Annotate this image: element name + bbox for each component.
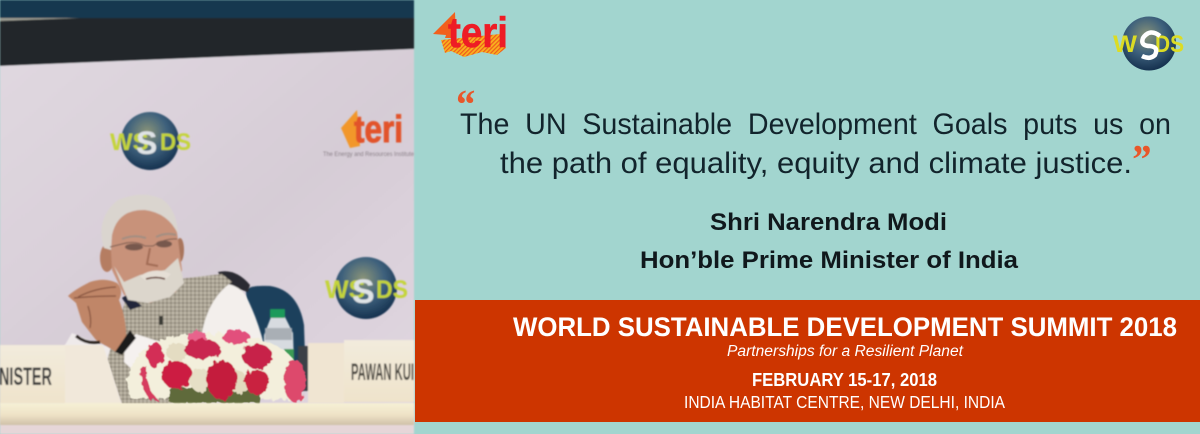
person xyxy=(62,195,264,405)
glasses xyxy=(110,239,177,247)
flower arrangement xyxy=(127,330,306,403)
banner background xyxy=(415,300,1200,422)
backdrop logo: WSDS right: WS xyxy=(325,276,365,304)
summit venue: INDIA HABITAT CENTRE, NEW DELHI, INDIA xyxy=(684,392,1005,412)
teri wordmark: teri xyxy=(448,9,508,57)
backdrop logo: WSDS left: WS xyxy=(110,129,149,156)
backdrop logo: WSDS left xyxy=(110,112,191,170)
chair xyxy=(246,286,306,385)
name plate: left xyxy=(0,345,122,405)
backdrop logo: WSDS left: DS xyxy=(160,129,191,156)
globe xyxy=(1122,16,1176,70)
speaker name: Shri Narendra Modi xyxy=(710,209,947,236)
water bottle xyxy=(263,309,294,365)
backdrop logo: WSDS right: DS xyxy=(376,276,408,304)
summit theme: Partnerships for a Resilient Planet xyxy=(727,343,964,360)
watch and wrist band xyxy=(115,330,136,355)
banner: PAWAN KUI xyxy=(351,359,414,386)
opening quotation mark: “ xyxy=(454,81,475,127)
closing quotation mark: ” xyxy=(1130,136,1150,182)
face xyxy=(100,244,114,272)
quote xyxy=(454,81,1171,182)
summit date: FEBRUARY 15-17, 2018 xyxy=(752,370,937,390)
logo: teri xyxy=(433,9,508,57)
swirl S xyxy=(1142,32,1160,58)
table edge xyxy=(0,403,414,425)
hair xyxy=(101,195,178,250)
teri hatched shadow xyxy=(441,34,506,57)
backdrop logo: WSDS right xyxy=(325,257,408,319)
logo: WSDS globe: DS xyxy=(1155,31,1184,58)
hands xyxy=(68,280,126,352)
quote line 1: The UN Sustainable Development Goals puts us on xyxy=(460,108,1171,141)
teri arrow xyxy=(433,12,456,38)
backdrop logo: WSDS left: S xyxy=(136,125,157,161)
name plate: right xyxy=(298,340,414,403)
backdrop logo: teri: The Energy and Resources Institute xyxy=(323,152,415,158)
logo: WSDS globe xyxy=(1113,16,1184,70)
attribution xyxy=(640,209,1018,274)
backdrop logo: WSDS right: S xyxy=(352,273,375,311)
name plate: left: NISTER xyxy=(0,363,52,391)
photo backdrop xyxy=(0,0,414,434)
photo: speaker at the summit xyxy=(0,0,415,434)
panel: summit banner xyxy=(415,300,1200,422)
WSDS wordmark: W xyxy=(1113,31,1137,58)
summit title: WORLD SUSTAINABLE DEVELOPMENT SUMMIT 2018 xyxy=(513,312,1177,342)
quote line 2: the path of equality, equity and climate justice. xyxy=(500,147,1132,180)
backdrop logo: teri xyxy=(323,109,415,158)
backdrop logo: teri: teri xyxy=(354,109,403,151)
beard xyxy=(114,258,184,303)
speaker role: Hon’ble Prime Minister of India xyxy=(640,247,1018,274)
